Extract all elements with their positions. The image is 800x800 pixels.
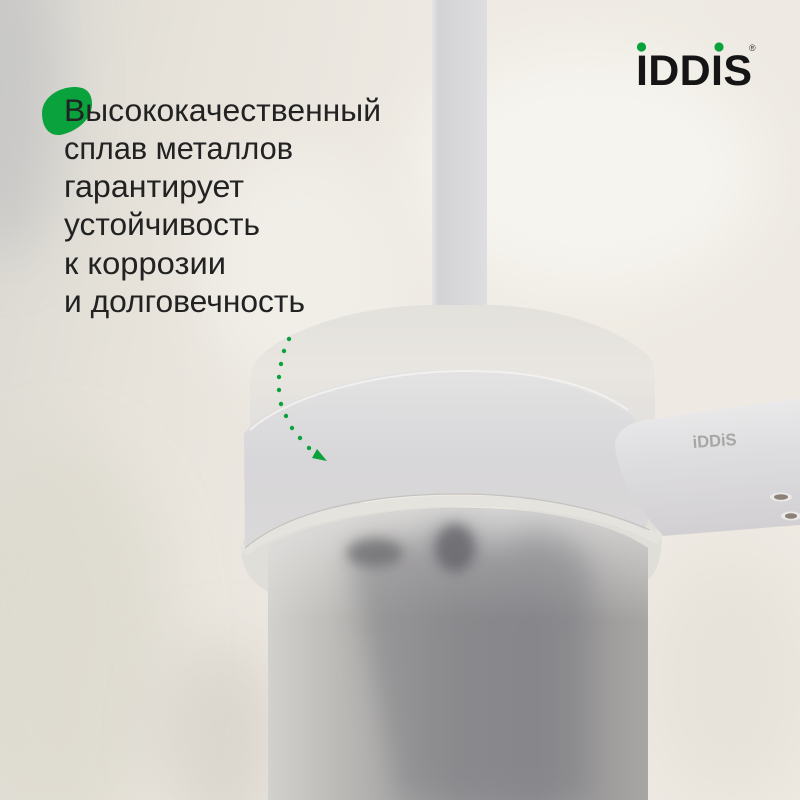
- IDDIS logo: ®: [749, 43, 756, 53]
- white metal band: [244, 370, 660, 548]
- description text: устойчивость: [64, 206, 260, 242]
- description text: и долговечность: [64, 283, 305, 319]
- frosted upper cup: [250, 305, 655, 445]
- seal lip: [243, 501, 660, 552]
- description text: сплав металлов: [64, 130, 293, 166]
- dotted arrow: [277, 337, 327, 461]
- IDDIS logo: IDDIS: [636, 47, 752, 95]
- band top highlight: [250, 371, 628, 430]
- description text: гарантирует: [64, 168, 244, 204]
- description text: Высококачественный: [64, 92, 381, 128]
- green blob accent: [42, 87, 92, 135]
- arm screws: [770, 492, 800, 520]
- arm logo: iDDiS: [692, 430, 737, 452]
- translucent ring under band: [242, 500, 662, 592]
- arm of holder: [615, 398, 800, 536]
- lower glass cylinder: [268, 500, 648, 800]
- description text: [64, 92, 381, 319]
- ring edge line: [245, 494, 650, 548]
- description text: к коррозии: [64, 245, 226, 281]
- pole: [432, 0, 487, 312]
